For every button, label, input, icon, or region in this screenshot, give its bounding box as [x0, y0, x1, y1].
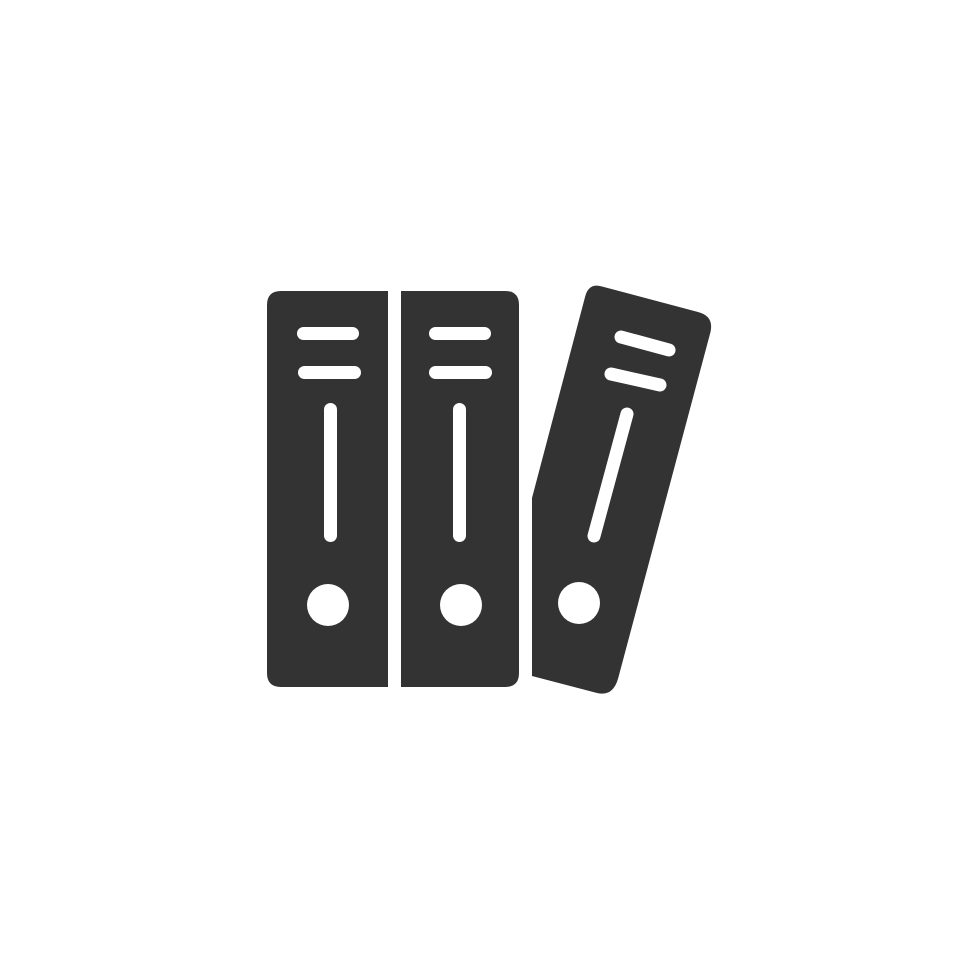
icon: three office binders	[267, 286, 711, 694]
binder: left	[267, 291, 388, 687]
binder: right tilted	[532, 286, 711, 694]
binder: middle	[401, 291, 519, 687]
